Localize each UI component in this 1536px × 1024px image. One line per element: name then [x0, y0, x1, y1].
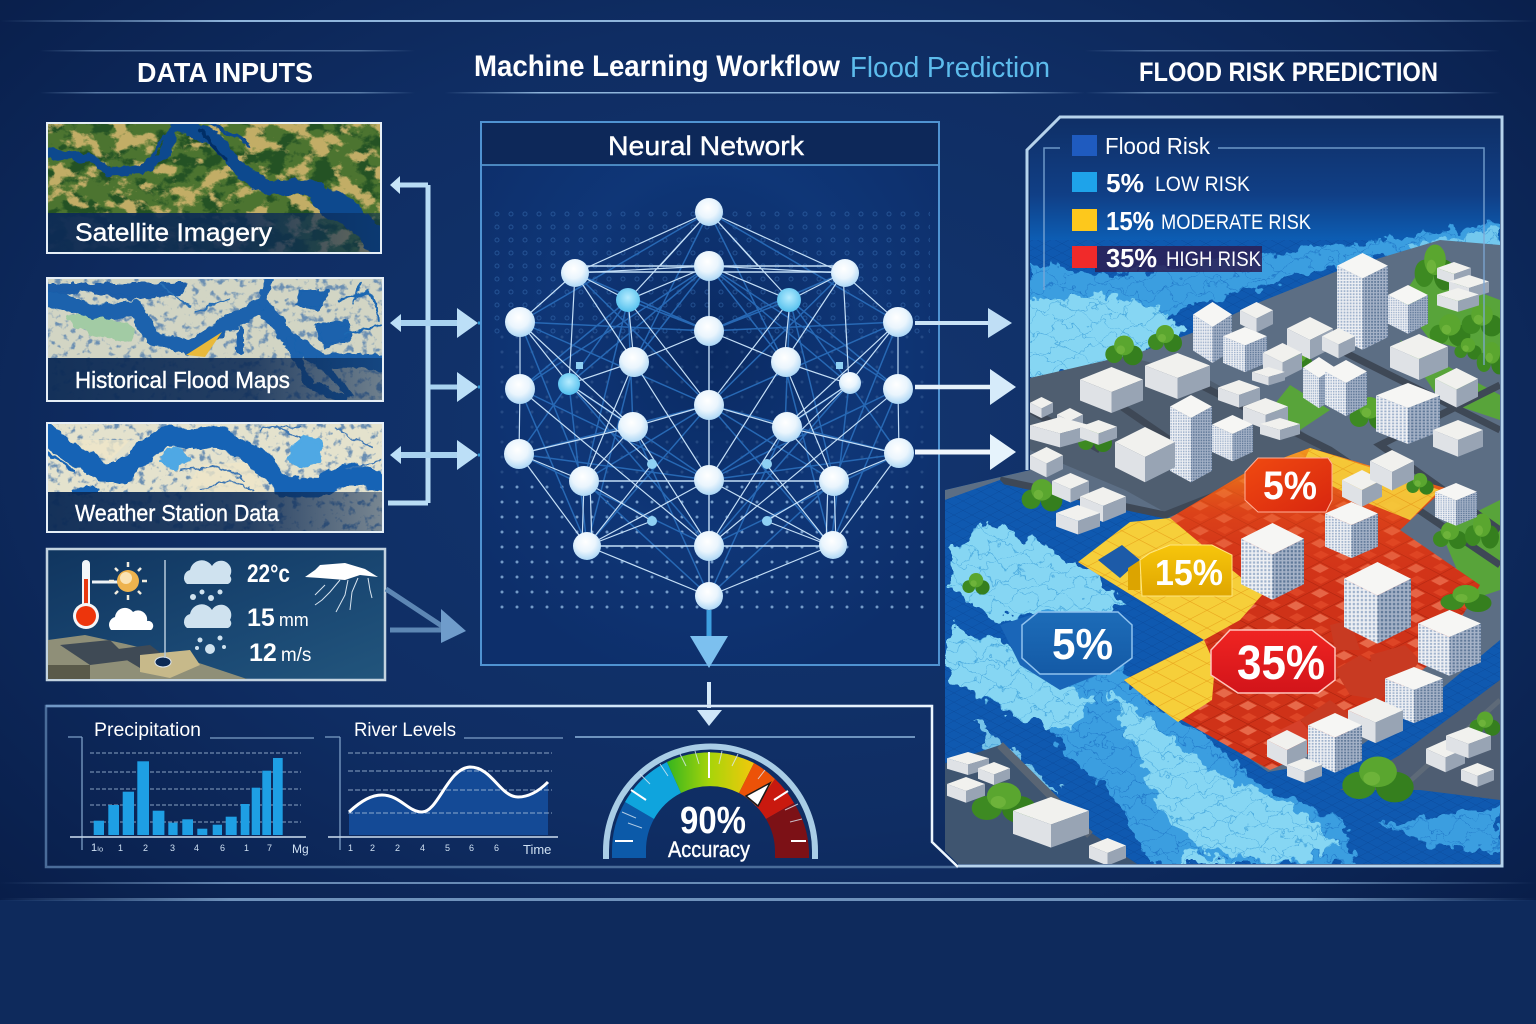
chart: precipitation: 6: [220, 843, 225, 853]
arrow: output three: [915, 434, 1016, 470]
chart: river levels: 4: [420, 843, 425, 853]
icon: sun: [109, 562, 147, 600]
chart: river levels: 2: [370, 843, 375, 853]
legend: moderate risk: [1072, 206, 1311, 236]
icon: white cloud: [109, 608, 153, 630]
chart: river levels: 2: [395, 843, 400, 853]
heading: neural network: Neural Network: [608, 131, 805, 161]
arrow: second input link: [430, 372, 508, 402]
gauge value: 90%: [680, 800, 746, 842]
panel: neural network: [481, 122, 939, 665]
badge: 5% blue: 5%: [1052, 620, 1113, 669]
heading: data inputs: DATA INPUTS: [137, 57, 313, 88]
chart: precipitation: 2: [143, 843, 148, 853]
legend: high risk: HIGH RISK: [1166, 248, 1261, 271]
risk zone moderate: [1078, 448, 1440, 722]
chart: precipitation: 3: [170, 843, 175, 853]
chart: precipitation: [68, 720, 314, 856]
arrow: weather readings link: [386, 589, 466, 643]
chart: precipitation: 4: [194, 843, 199, 853]
chart: river levels: 1: [348, 843, 353, 853]
title: Flood Prediction: [850, 52, 1050, 84]
badge: 5% red: [1245, 458, 1332, 512]
chart: precipitation: 1: [118, 843, 123, 853]
arrow: data input bus: [388, 176, 428, 503]
arrow: output one: [915, 308, 1012, 338]
panel: charts and accuracy: [46, 706, 958, 867]
badge: 5% red: 5%: [1263, 464, 1317, 508]
legend: low risk: LOW RISK: [1155, 173, 1250, 196]
legend: moderate risk: MODERATE RISK: [1161, 211, 1311, 234]
panel: historical flood maps: [44, 277, 385, 402]
chart: precipitation: 7: [267, 843, 272, 853]
arrow: historical maps link: [390, 308, 508, 338]
legend: low risk: 5%: [1106, 168, 1144, 198]
title: [474, 50, 1050, 84]
label: historical flood maps: Historical Flood Maps: [75, 367, 290, 393]
arrow: output two: [915, 369, 1016, 405]
water patches upper: [1020, 222, 1500, 380]
panel: flood risk map: [940, 117, 1507, 870]
badge: 35% red: 35%: [1237, 637, 1325, 690]
arrow: weather station link: [390, 440, 508, 470]
flood zone water: [945, 480, 1500, 864]
reading: wind speed: 12m/s: [249, 639, 311, 667]
chart: river levels: 5: [445, 843, 450, 853]
chart: precipitation: 1ₗₒ: [91, 842, 103, 854]
legend: moderate risk: 15%: [1106, 206, 1154, 236]
arrow: network to accuracy: [690, 610, 728, 726]
risk zone high: [1078, 448, 1480, 770]
panel: weather readings: [47, 549, 385, 680]
badge: 15% yellow: 15%: [1155, 552, 1223, 593]
label: satellite imagery: Satellite Imagery: [75, 219, 273, 247]
legend: low risk: [1072, 168, 1250, 198]
chart: river levels: River Levels: [354, 720, 456, 741]
reading: rainfall: 15mm: [247, 604, 309, 632]
station ground: [48, 635, 250, 680]
chart: precipitation: Mg: [292, 842, 309, 856]
trees: [962, 244, 1507, 823]
icon: rain cloud: [184, 560, 231, 601]
chart: river levels: [325, 720, 563, 857]
legend: high risk: 35%: [1106, 243, 1157, 273]
lower left and lower right city blocks: [940, 680, 1500, 866]
roads: [1000, 330, 1500, 565]
chart: river levels: 6: [494, 843, 499, 853]
chart: precipitation: Precipitation: [94, 720, 201, 741]
icon: storm cloud: [305, 563, 378, 612]
panel: satellite imagery: [40, 122, 390, 260]
badge: 15% yellow: [1128, 545, 1232, 596]
chart: precipitation: 1: [244, 843, 249, 853]
chart: river levels: 6: [469, 843, 474, 853]
buildings: [947, 253, 1494, 866]
city ground upper: [945, 240, 1500, 772]
badge: 5% blue: [1022, 612, 1132, 674]
gauge label: Accuracy: [668, 837, 750, 862]
legend: flood risk: Flood Risk: [1105, 133, 1210, 159]
legend: [1072, 133, 1311, 273]
panel: weather station data: [42, 422, 388, 533]
red raised blocks: [1270, 622, 1418, 754]
heading: flood risk prediction: FLOOD RISK PREDICTION: [1139, 57, 1438, 87]
gauge: accuracy: [606, 746, 815, 862]
icon: drops cloud: [184, 604, 231, 654]
legend: high risk: [1072, 243, 1261, 273]
label: weather station data: Weather Station Data: [75, 500, 279, 526]
icon: thermometer: [73, 560, 118, 629]
network diagram: [504, 198, 914, 610]
reading: temperature: 22°c: [247, 560, 290, 588]
badge: 35% red: [1211, 630, 1335, 693]
title: Machine Learning Workflow: [474, 50, 841, 83]
chart: river levels: Time: [523, 842, 551, 857]
